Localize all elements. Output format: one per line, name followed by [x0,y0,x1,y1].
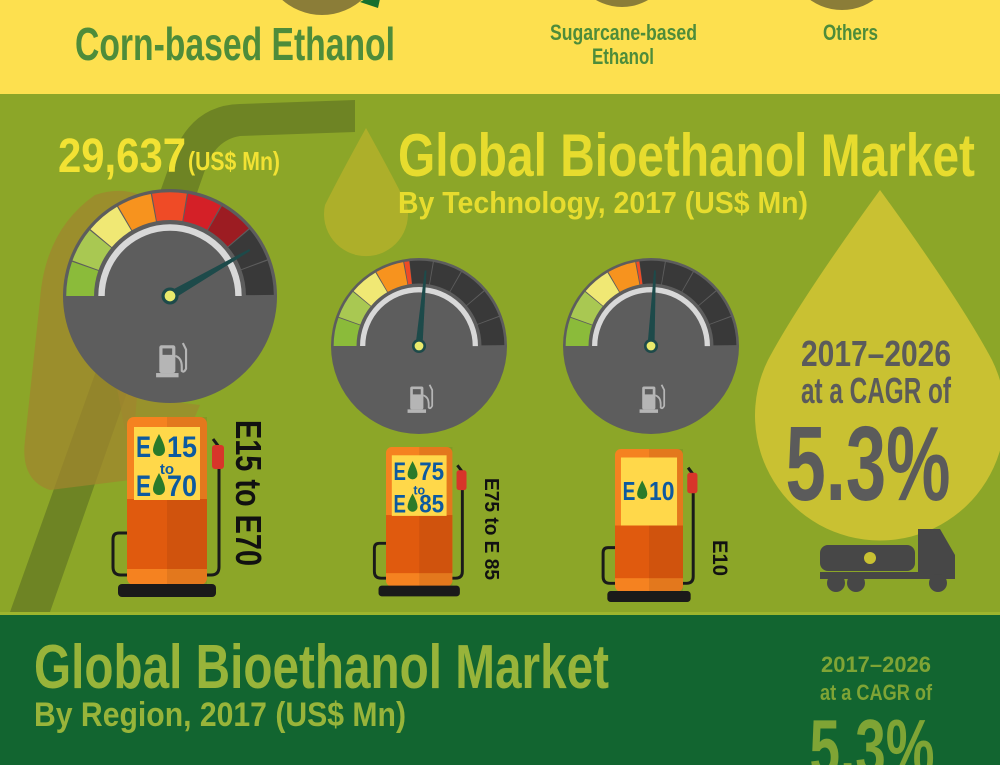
CAGR bottom: 2017–2026 [821,652,931,677]
pump 2: E75 to E85: to [413,483,425,497]
CAGR bottom [810,652,934,765]
big drop with CAGR: 2017–2026 [801,333,951,374]
pump 3: E10 [603,449,697,602]
pump 3: E10: E [623,478,635,506]
label: E10: E10 [708,540,731,576]
title: by region [34,633,609,734]
pump 1: E15 to E70: 70 [167,470,197,503]
value: 29,637: 29,637 [58,130,186,183]
pump 2: E75 to E85: 85 [419,491,444,519]
green panel background [0,94,1000,612]
title: by region: By Region, 2017 (US$ Mn) [34,696,406,734]
pump 1: E15 to E70: 15 [167,431,197,464]
label: E75 to E85: E75 to E 85 [480,478,502,580]
pump 2: E75 to E85: E [393,458,406,486]
CAGR bottom: at a CAGR of [820,680,933,705]
gauge 2 [331,258,507,434]
pump 2: E75 to E85: 75 [419,458,444,486]
label: corn-based ethanol: Corn-based Ethanol [75,18,395,70]
top yellow band [0,0,1000,94]
label: others: Others [823,20,878,45]
label: E15 to E70: E15 to E70 [228,420,269,566]
pump 2: E75 to E85 [374,447,467,596]
big drop with CAGR [755,190,1000,541]
icon: tanker truck [820,529,955,592]
gauge 3 [563,258,739,434]
pump 1: E15 to E70: E [136,431,151,464]
value: 29,637: (US$ Mn) [188,146,280,176]
title: by technology: By Technology, 2017 (US$ Mn) [398,185,808,220]
title: by region: Global Bioethanol Market [34,633,609,702]
pump 1: E15 to E70: E [136,470,151,503]
label: sugarcane-based ethanol: Sugarcane-based [550,20,697,45]
small decorative drop [324,128,408,256]
hose and nozzle decoration [10,100,355,612]
pump 3: E10: 10 [649,478,674,506]
pump 1: E15 to E70 [113,417,224,597]
gauge 1 (big) [63,189,277,403]
pump 1: E15 to E70: to [160,461,174,478]
pump 2: E75 to E85: E [393,491,406,519]
title: by technology [398,122,975,220]
label: sugarcane-based ethanol: Ethanol [592,44,654,69]
label: sugarcane-based ethanol [550,20,697,69]
value: 29,637 [58,130,280,183]
bottom dark green panel [0,612,1000,765]
